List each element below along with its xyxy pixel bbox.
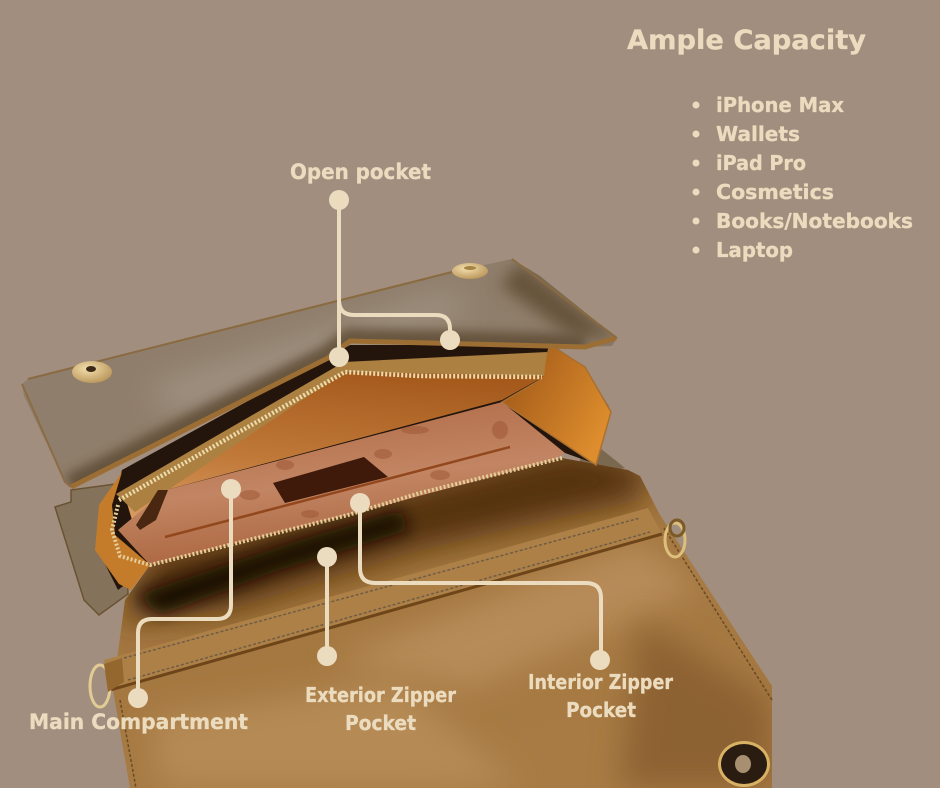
left flap snap button <box>72 361 112 383</box>
side chain ring right <box>665 520 685 557</box>
lining logo marks <box>240 421 508 518</box>
capacity list: iPhone Max <box>716 93 844 117</box>
callout: open pocket <box>290 160 460 367</box>
upper flap <box>22 259 620 487</box>
capacity list: Wallets <box>716 122 800 146</box>
right orange panel <box>502 345 611 465</box>
left side gusset <box>55 483 128 615</box>
label: exterior zipper pocket: Pocket <box>345 711 416 735</box>
callout: interior zipper pocket <box>350 493 673 722</box>
capacity list: iPad Pro <box>716 151 806 175</box>
interior back of bag <box>95 345 611 590</box>
left strap ring <box>90 658 124 707</box>
capacity list: Laptop <box>716 238 793 262</box>
leather label patch <box>273 457 388 503</box>
title: Ample Capacity <box>627 25 866 56</box>
patterned lining <box>118 402 565 565</box>
upper zipper tape <box>116 352 547 512</box>
label: interior zipper pocket: Interior Zipper <box>528 670 673 694</box>
stitched edge <box>120 528 772 788</box>
orange side edge <box>95 472 150 590</box>
upper zipper teeth <box>119 372 542 500</box>
zipper pull tab <box>136 490 168 530</box>
label: open pocket: Open pocket <box>290 160 431 184</box>
handbag illustration <box>22 259 772 788</box>
orange back wall <box>126 372 545 530</box>
lower zipper <box>112 458 562 565</box>
capacity list: Books/Notebooks <box>716 209 913 233</box>
label: interior zipper pocket: Pocket <box>566 698 636 722</box>
lining zipper <box>165 447 510 537</box>
strap band across body <box>104 508 662 690</box>
right flap snap button <box>452 263 488 279</box>
callout: exterior zipper pocket <box>305 547 456 735</box>
front magnetic snap <box>718 741 770 787</box>
right side gusset tip <box>575 440 625 474</box>
capacity list <box>692 93 913 262</box>
label: main compartment: Main Compartment <box>29 710 248 734</box>
label: exterior zipper pocket: Exterior Zipper <box>305 683 456 707</box>
capacity list: Cosmetics <box>716 180 834 204</box>
lower bag body <box>104 445 772 788</box>
callout: main compartment <box>29 479 248 734</box>
